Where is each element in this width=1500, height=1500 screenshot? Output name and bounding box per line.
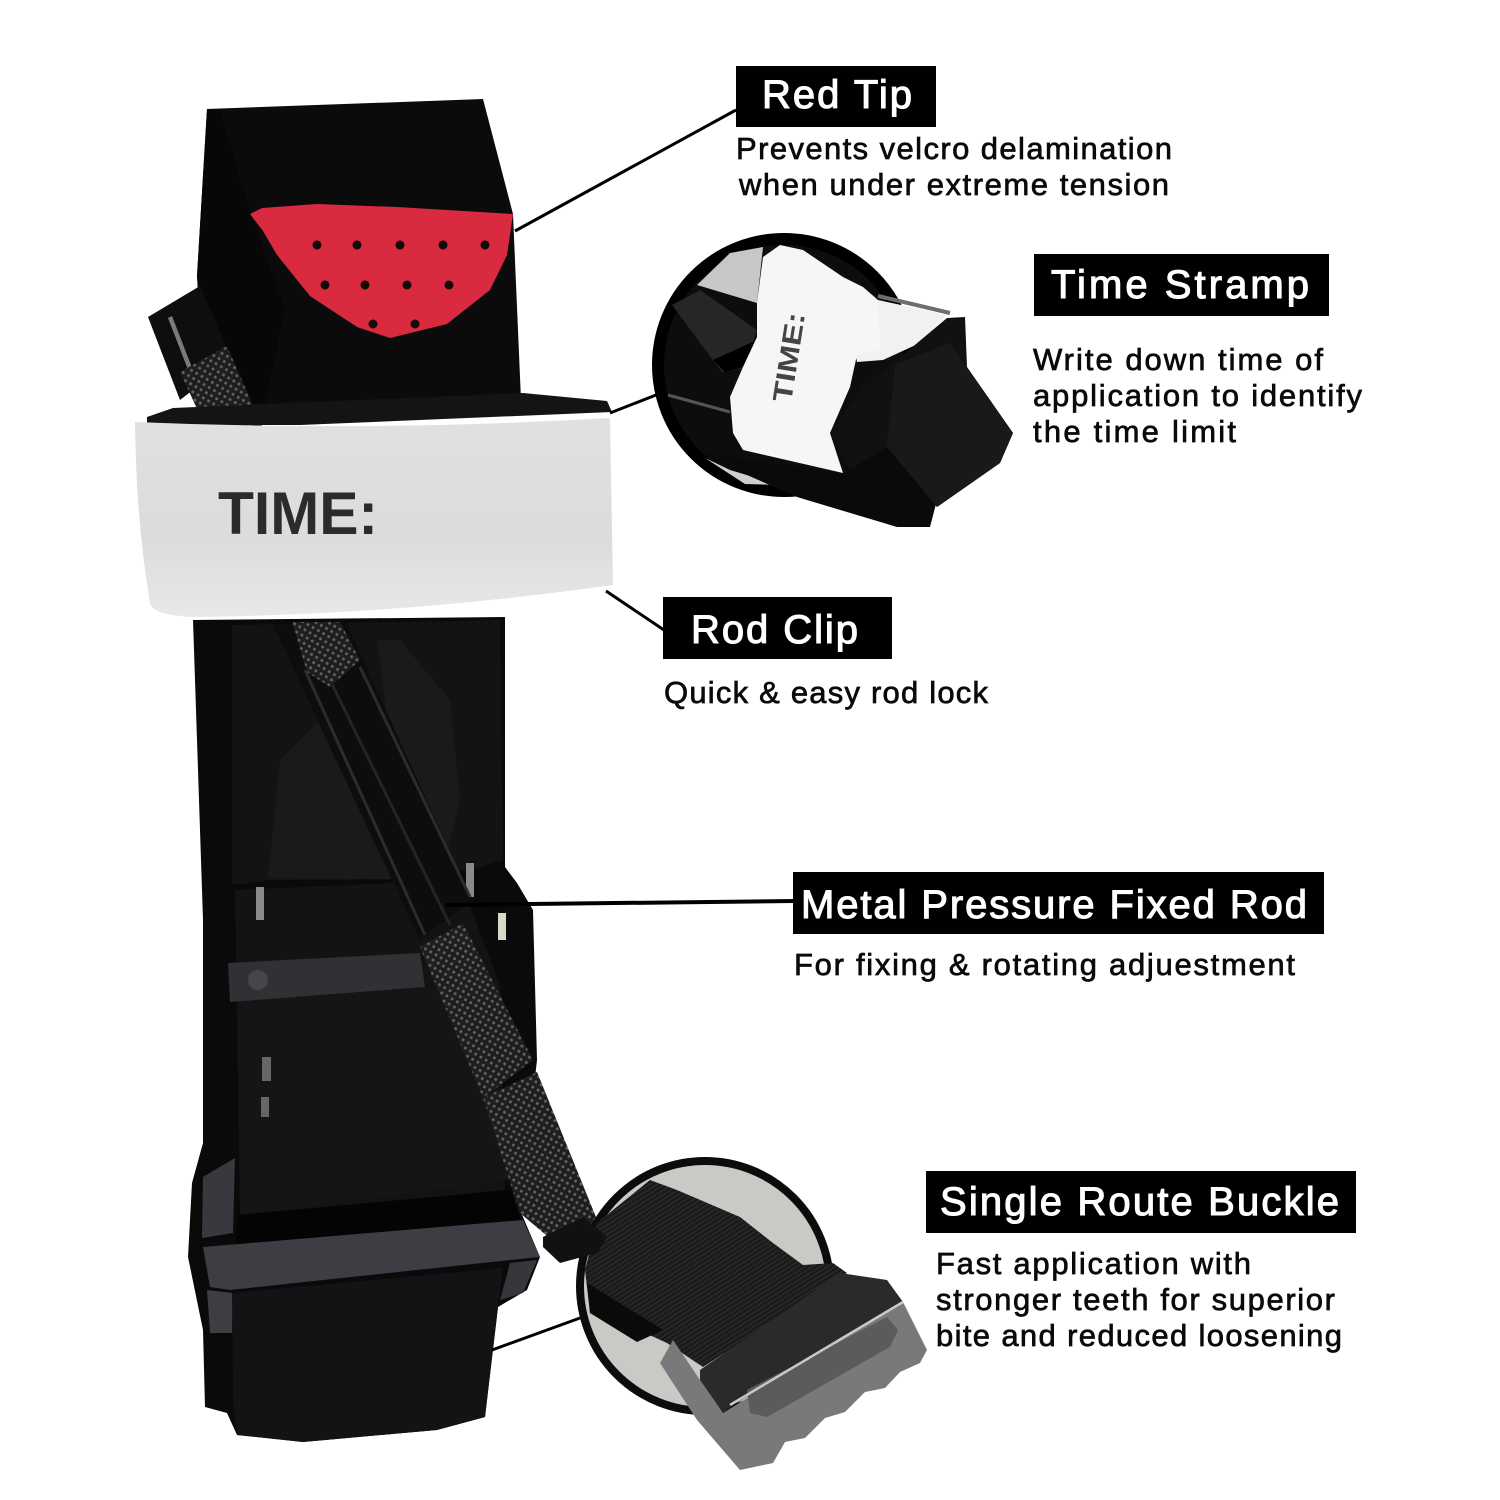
white label strip	[730, 245, 880, 473]
white time band	[135, 418, 613, 617]
label: single route buckle: stronger teeth for superior	[936, 1282, 1335, 1317]
time label on inset: TIME:	[767, 310, 811, 404]
red tip	[250, 204, 513, 338]
label: time stramp: Write down time of	[1033, 342, 1323, 377]
label: single route buckle: Single Route Buckle	[940, 1180, 1339, 1224]
stitching	[256, 863, 506, 1117]
lower black strap	[703, 447, 937, 527]
label: time stramp: application to identify	[1033, 378, 1362, 413]
time label on band: TIME:	[218, 480, 378, 547]
lower strap end	[232, 1268, 503, 1442]
middle panel	[235, 880, 505, 1215]
label: time stramp: the time limit	[1033, 414, 1236, 449]
label: rod clip: Quick & easy rod lock	[664, 675, 988, 710]
buckle lower bar	[203, 1220, 540, 1333]
label: rod clip: Rod Clip	[691, 608, 858, 652]
buckle side tabs	[202, 1158, 235, 1238]
upper strap	[197, 99, 521, 420]
inner folded strap	[268, 640, 460, 880]
buckle grey base	[660, 1302, 927, 1470]
label: time stramp	[1033, 254, 1362, 449]
rod top end	[148, 286, 262, 426]
label: red tip: Red Tip	[762, 73, 912, 117]
white label back	[843, 287, 947, 362]
time band lip	[147, 393, 612, 425]
label: red tip	[736, 66, 1172, 202]
label: red tip: when under extreme tension	[738, 167, 1169, 202]
leader lines	[445, 110, 794, 1350]
strap fold	[197, 109, 285, 420]
velcro loop	[830, 317, 1013, 507]
buckle blade	[747, 1317, 898, 1417]
label: metal pressure fixed rod	[793, 872, 1324, 982]
label: single route buckle	[926, 1171, 1356, 1353]
callout: time stamp inset	[658, 239, 1013, 527]
label: red tip: Prevents velcro delamination	[736, 131, 1172, 166]
buckle top bar	[228, 953, 425, 1002]
label: metal pressure fixed rod: Metal Pressure Fixed Rod	[801, 883, 1307, 927]
label: single route buckle: bite and reduced loosening	[936, 1318, 1342, 1353]
label: metal pressure fixed rod: For fixing & rotating adjuestment	[794, 947, 1295, 982]
label: time stramp: Time Stramp	[1051, 263, 1309, 307]
rod shaft	[273, 620, 600, 1247]
rod end cap	[543, 1217, 607, 1263]
label: rod clip	[663, 597, 988, 710]
webbing panel	[232, 620, 503, 885]
label: single route buckle: Fast application with	[936, 1246, 1251, 1281]
product: tourniquet	[135, 99, 613, 1442]
lower body	[188, 617, 540, 1442]
callout: buckle inset	[580, 1161, 927, 1470]
buckle dark top	[700, 1273, 903, 1413]
